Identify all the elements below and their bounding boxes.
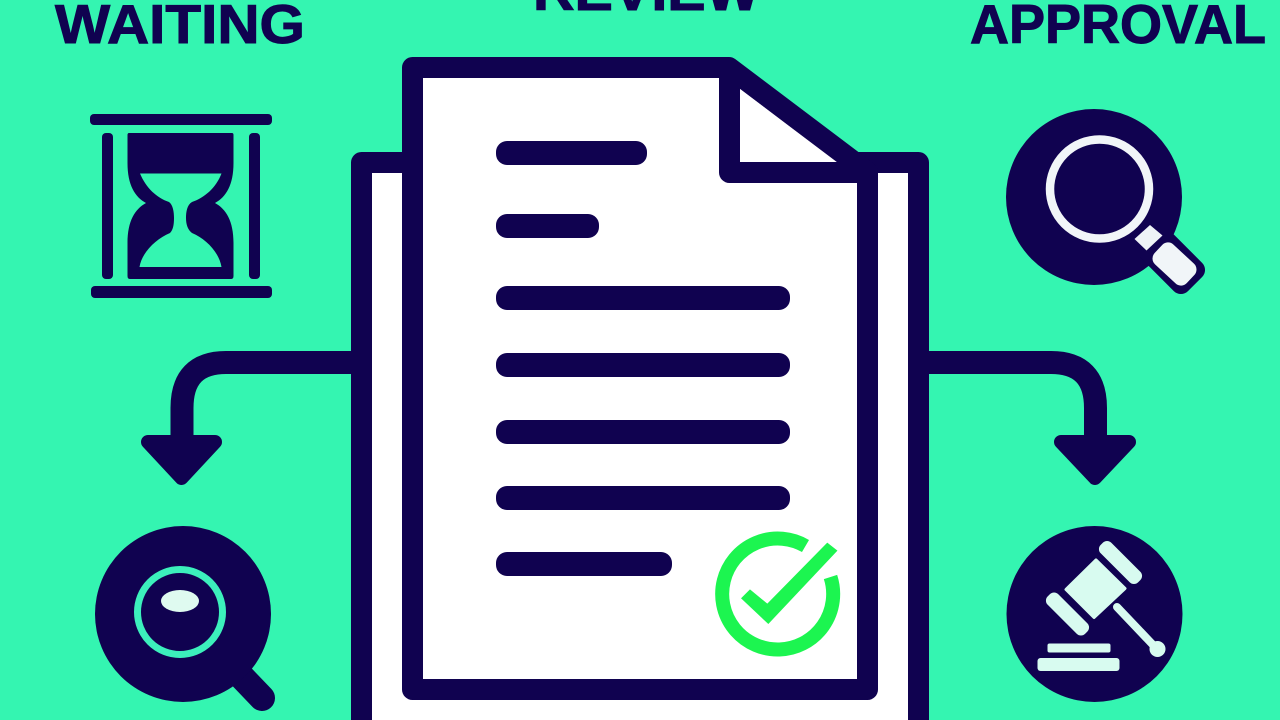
fold triangle	[740, 89, 836, 162]
document fold	[730, 72, 867, 172]
icon: document review magnifier	[1006, 109, 1209, 298]
arrow: left branch	[148, 362, 352, 478]
icon: hourglass	[90, 114, 272, 298]
arrow: right branch	[928, 362, 1129, 478]
front document sheet	[412, 68, 868, 690]
icon: search magnifier	[95, 526, 271, 702]
text lines	[496, 141, 790, 576]
icon: green check badge	[722, 539, 837, 650]
icon: gavel	[1006, 526, 1182, 702]
back document sheet	[362, 162, 918, 720]
